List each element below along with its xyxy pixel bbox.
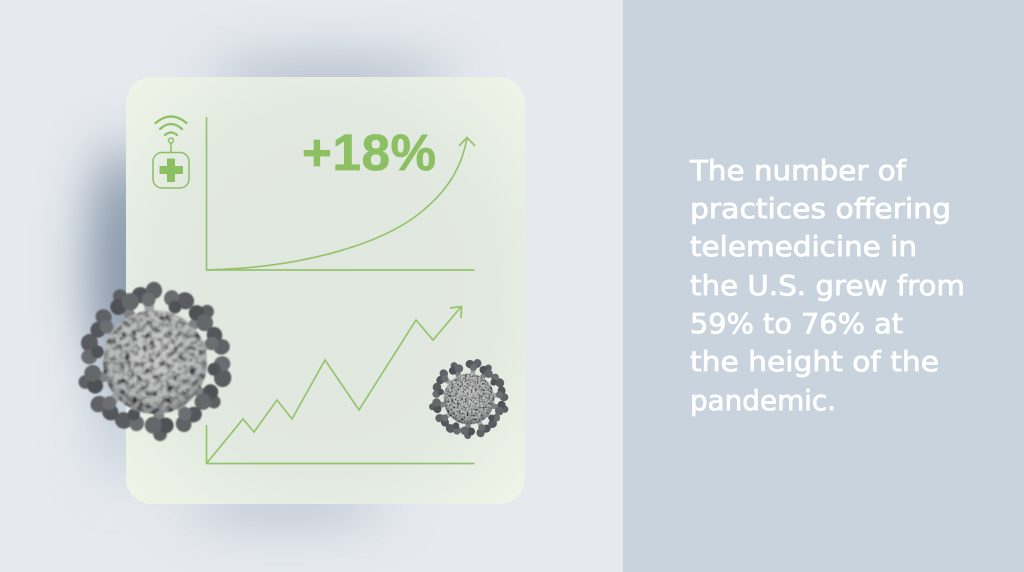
text block: telemedicine statement: 59% to 76% at <box>690 307 903 340</box>
chart: zigzag growth <box>206 306 474 464</box>
right panel <box>623 0 1024 572</box>
text block: telemedicine statement <box>689 154 965 417</box>
text block: telemedicine statement: the U.S. grew from <box>690 269 965 302</box>
icon: telehealth wifi cross <box>153 116 189 188</box>
stat: +18%: +18% <box>302 124 436 181</box>
text block: telemedicine statement: telemedicine in <box>690 230 917 263</box>
icon: large coronavirus <box>75 281 234 442</box>
chart: exponential growth <box>206 117 475 270</box>
text block: telemedicine statement: the height of the <box>690 345 939 378</box>
icon: small coronavirus <box>428 357 510 439</box>
card shadow <box>93 66 455 516</box>
panel: chart card <box>126 77 525 504</box>
left background <box>0 0 623 572</box>
text block: telemedicine statement: The number of <box>689 154 907 187</box>
text block: telemedicine statement: pandemic. <box>690 384 836 417</box>
text block: telemedicine statement: practices offering <box>690 192 951 225</box>
